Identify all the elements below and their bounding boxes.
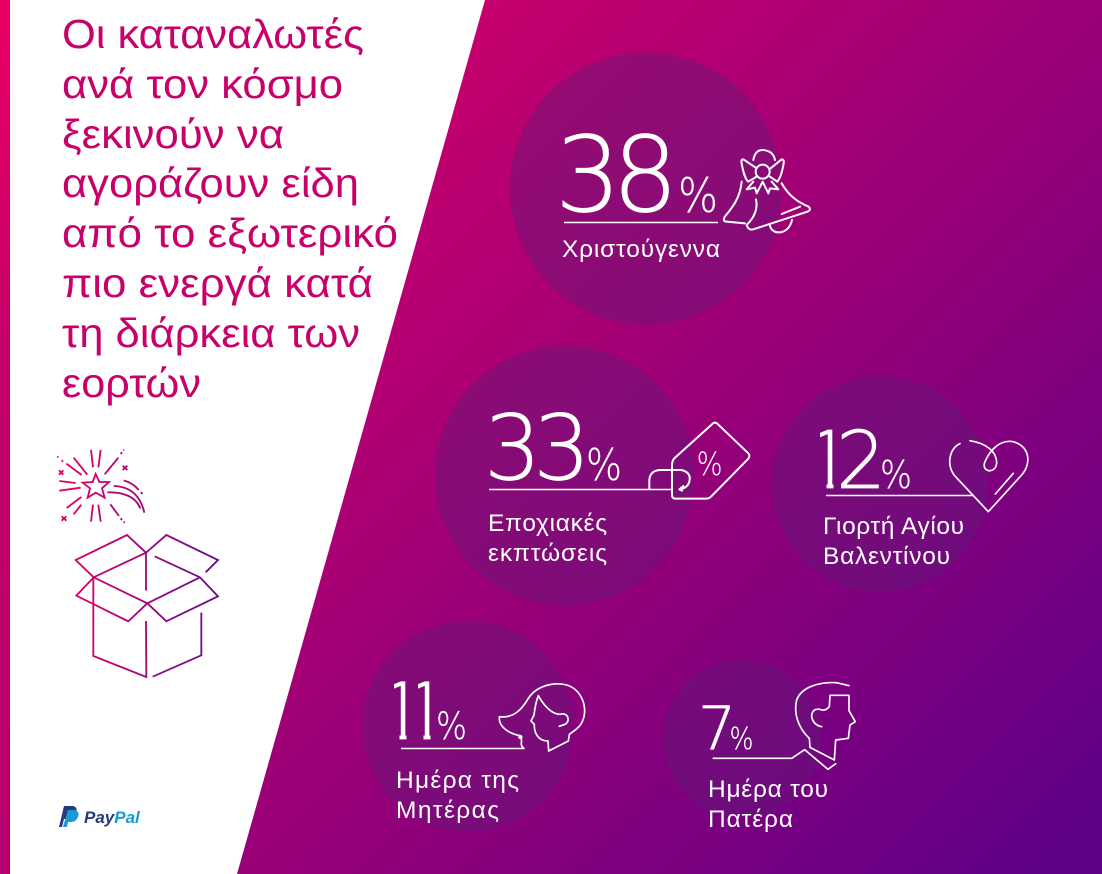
value: 7%: % (730, 722, 754, 757)
underline (564, 222, 718, 224)
value: 33%: % (586, 440, 622, 491)
label (823, 513, 964, 570)
icon: woman's head (499, 684, 585, 751)
underline (826, 494, 974, 496)
title: από το εξωτερικό (62, 210, 398, 256)
label: Ημέρα του (708, 776, 828, 803)
underline (401, 748, 524, 750)
icon: price tag: % (697, 447, 723, 483)
label: Ημέρα της (396, 767, 519, 794)
value: 12% (820, 428, 910, 489)
title: ανά τον κόσμο (62, 61, 343, 107)
title: ξεκινούν να (62, 111, 284, 157)
panel: Christmas 38% (510, 52, 810, 324)
label (396, 767, 519, 824)
value: 7%: 7 (698, 694, 736, 764)
icon: fireworks star (57, 450, 144, 523)
label: Χριστούγεννα (562, 236, 720, 263)
value: 11%: % (436, 705, 467, 748)
title: εορτών (62, 360, 201, 406)
value: 12%: 1 (804, 415, 854, 507)
label: Γιορτή Αγίου (823, 513, 964, 540)
value: 12%: % (880, 453, 912, 497)
value: 12%: 2 (836, 415, 886, 507)
logo: PayPal (59, 806, 141, 827)
value: 7% (698, 694, 754, 764)
value: 38%: % (678, 169, 718, 224)
logo: PayPal: PayPal (84, 808, 141, 827)
underline (489, 488, 672, 490)
label: Πατέρα (708, 806, 793, 833)
label: εκπτώσεις (488, 540, 607, 567)
panel: seasonal sales 33% (435, 346, 749, 605)
underline and icon: man's head (713, 683, 855, 769)
title (62, 11, 398, 406)
value: 11%: 1 (377, 668, 427, 758)
icon: price tag (649, 423, 749, 499)
panel: Father's Day 7% (663, 660, 855, 833)
title: πιο ενεργά κατά (62, 260, 373, 306)
title: τη διάρκεια των (62, 310, 360, 356)
left accent bar (0, 0, 10, 874)
label (708, 776, 828, 833)
label (488, 510, 607, 567)
icon: heart (950, 441, 1028, 512)
label: Βαλεντίνου (823, 543, 950, 570)
label: Εποχιακές (488, 510, 607, 537)
panel: Valentine's Day 12% (772, 376, 1028, 592)
value: 33%: 33 (484, 396, 583, 501)
label: Μητέρας (396, 797, 499, 824)
panel: Mother's Day 11% (362, 620, 585, 832)
gradient background panel (237, 0, 1102, 874)
icon: bells (724, 150, 810, 232)
value: 38%: 38 (555, 114, 669, 236)
value: 11% (394, 681, 465, 740)
title: αγοράζουν είδη (62, 160, 359, 206)
value: 11%: 1 (401, 668, 451, 758)
icon: open gift box (76, 535, 218, 677)
title: Οι καταναλωτές (62, 11, 364, 57)
